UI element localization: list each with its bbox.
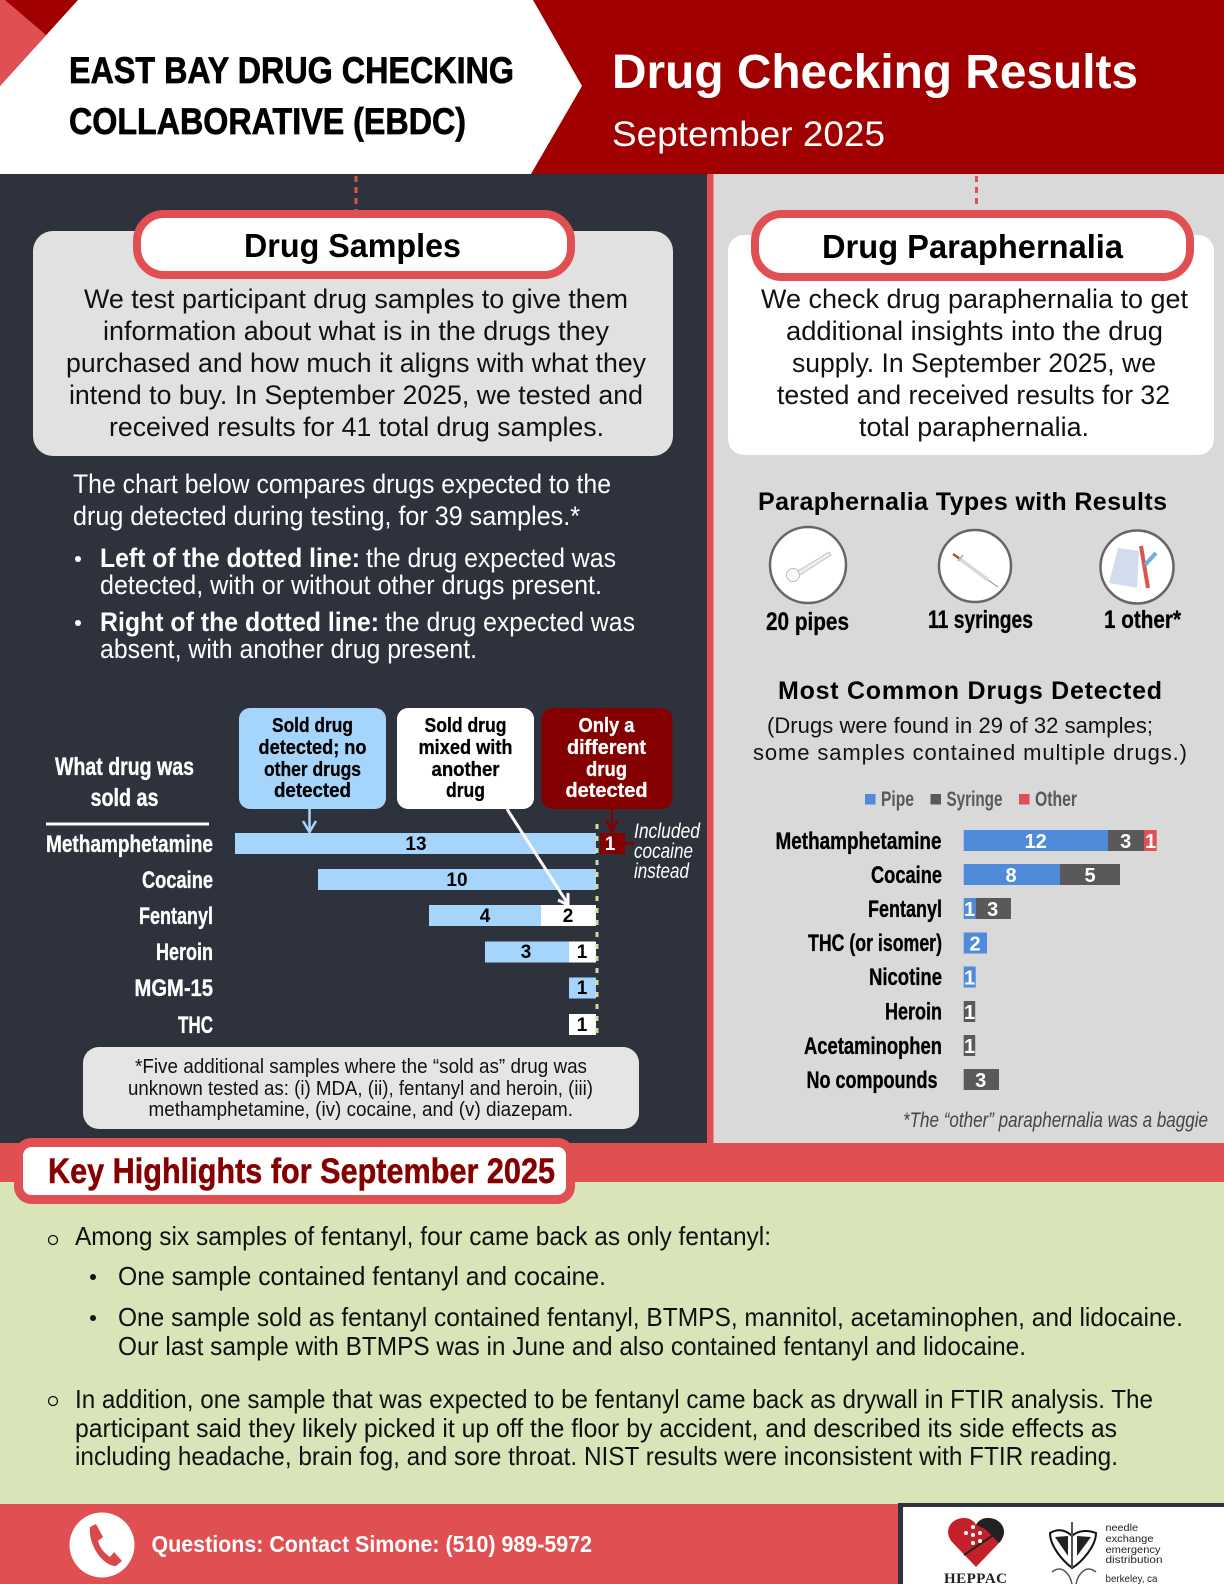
arrow: red legend to bar <box>606 809 618 831</box>
label: 20 pipes: 20 pipes <box>766 608 849 636</box>
heading: drug paraphernalia: Drug Paraphernalia <box>822 228 1124 265</box>
legend box: sold drug detected: other drugs <box>264 759 361 781</box>
dotted divider line <box>596 824 598 1037</box>
label: 11 syringes: 11 syringes <box>928 606 1033 634</box>
row labels <box>776 828 942 1094</box>
column heading: what drug was sold as: What drug was <box>55 753 194 781</box>
row labels <box>46 831 213 1039</box>
footnote box: additional samples <box>83 1047 639 1129</box>
contact text: Questions: Contact Simone: (510) 989-5972 <box>152 1531 592 1557</box>
icon: baggie <box>1100 530 1174 604</box>
heading: drug samples <box>137 214 571 275</box>
row labels: MGM-15 <box>134 975 213 1002</box>
panel: drug samples <box>0 174 707 1143</box>
legend box: sold drug detected: Sold drug <box>272 715 353 737</box>
row labels: Cocaine <box>871 862 942 889</box>
highlight: drywall sample: including headache, brain fog, and sore throat. NIST results were inconsistent with FTIR reading. <box>75 1441 1118 1471</box>
highlight: fentanyl samples: Our last sample with BTMPS was in June and also contained fentanyl and lidocaine. <box>118 1331 1026 1361</box>
footer <box>0 1503 1224 1584</box>
row labels: Heroin <box>156 939 213 966</box>
row labels: Fentanyl <box>868 896 942 923</box>
legend box: sold drug mixed: another <box>432 759 500 781</box>
callout: included cocaine instead: instead <box>634 860 690 883</box>
heading: paraphernalia types: Paraphernalia Types with Results <box>758 488 1167 516</box>
highlight: drywall sample: In addition, one sample that was expected to be fentanyl came back as drywall in FTIR analysis. The <box>75 1384 1153 1414</box>
chart legend: Syringe <box>946 788 1002 811</box>
highlight: drywall sample: participant said they likely picked it up off the floor by accident, and described its side effects as <box>75 1413 1117 1443</box>
bars: 1 <box>964 1036 975 1058</box>
chart explanation text <box>73 469 635 664</box>
row labels: Cocaine <box>142 867 213 894</box>
chart legend <box>865 788 1077 811</box>
legend box: only a different drug: different <box>567 737 646 759</box>
footnote box: additional samples: *Five additional samples where the “sold as” drug was <box>135 1056 587 1078</box>
description box: We test participant drug samples to give them <box>84 284 628 314</box>
bars: 3 <box>1120 831 1131 853</box>
row labels: Fentanyl <box>139 903 213 930</box>
description box: additional insights into the drug <box>786 316 1163 346</box>
row labels: No compounds <box>806 1067 938 1094</box>
row labels: Heroin <box>885 998 942 1026</box>
logo text: needle exchange: exchange <box>1106 1533 1154 1545</box>
description box: information about what is in the drugs they <box>103 316 609 346</box>
header banner: September 2025 <box>612 115 885 154</box>
bars: 3 <box>987 899 998 921</box>
chart explanation text: The chart below compares drugs expected to the <box>73 469 611 499</box>
footnote box: additional samples: unknown tested as: (i) MDA, (ii), fentanyl and heroin, (iii) <box>128 1078 593 1100</box>
chart explanation text: detected, with or without other drugs present. <box>100 570 602 600</box>
legend box: only a different drug: drug <box>586 759 627 781</box>
header banner <box>0 0 1224 174</box>
bars: 12 <box>1025 831 1047 853</box>
chart explanation text: the drug expected was <box>366 543 616 573</box>
legend box: sold drug mixed: drug <box>446 780 485 802</box>
legend box: sold drug mixed <box>397 708 534 809</box>
highlight: fentanyl samples <box>48 1221 1183 1361</box>
arrow: white legend to bar <box>507 809 568 905</box>
logo text: needle exchange: distribution <box>1106 1554 1163 1566</box>
legend box: sold drug detected: detected; no <box>258 737 366 759</box>
bars <box>235 833 634 1036</box>
heading: drug samples: Drug Samples <box>244 227 461 264</box>
legend box: only a different drug <box>542 708 672 809</box>
bars: 1 <box>577 1015 588 1036</box>
icon: needle exchange heart <box>1050 1522 1096 1584</box>
heading: most common drugs detected: Most Common Drugs Detected <box>778 677 1162 705</box>
bar chart: drugs detected <box>776 828 1157 1094</box>
callout: included cocaine instead: Included <box>634 820 701 843</box>
description box: purchased and how much it aligns with what they <box>66 348 646 378</box>
description box <box>33 231 673 456</box>
footnote box: additional samples: methamphetamine, (iv) cocaine, and (v) diazepam. <box>148 1099 573 1121</box>
logo text: needle exchange <box>1106 1522 1163 1584</box>
chart explanation text: Right of the dotted line: <box>100 607 379 637</box>
legend box: sold drug detected <box>239 708 386 809</box>
row labels: Nicotine <box>869 964 942 991</box>
icon: phone <box>70 1512 134 1578</box>
chart legend: Pipe <box>881 788 914 811</box>
legend box: sold drug detected: detected <box>274 780 351 802</box>
highlight: fentanyl samples: One sample contained fentanyl and cocaine. <box>118 1261 606 1291</box>
bars: 4 <box>480 906 491 927</box>
icon: syringe <box>939 530 1011 602</box>
callout: included cocaine instead <box>634 820 701 883</box>
bars: 1 <box>605 834 616 855</box>
bars: 1 <box>964 1002 975 1024</box>
chart explanation text: Left of the dotted line: <box>100 543 360 573</box>
bars: 1 <box>964 968 975 990</box>
column heading: what drug was sold as <box>46 753 209 826</box>
description box: supply. In September 2025, we <box>792 348 1156 378</box>
logo panel <box>898 1503 1224 1584</box>
chart explanation text: absent, with another drug present. <box>100 634 477 664</box>
description box <box>728 235 1214 455</box>
bars: 2 <box>563 906 573 927</box>
heading: key highlights: Key Highlights for September 2025 <box>48 1152 555 1191</box>
heading: key highlights <box>18 1142 570 1200</box>
bars: 3 <box>521 942 531 963</box>
description box: tested and received results for 32 <box>777 380 1170 410</box>
bars: 1 <box>577 978 588 999</box>
highlight: drywall sample <box>48 1384 1153 1471</box>
row labels: Methamphetamine <box>776 828 942 855</box>
bars: 8 <box>1005 865 1017 887</box>
row labels: THC <box>178 1012 213 1039</box>
arrow: blue legend to bar <box>303 809 316 832</box>
callout: included cocaine instead: cocaine <box>634 840 693 863</box>
heading: drug paraphernalia <box>755 214 1190 277</box>
description box: received results for 41 total drug samples. <box>109 412 604 442</box>
chart explanation text: the drug expected was <box>385 607 635 637</box>
bars: 2 <box>969 934 981 956</box>
bars: 1 <box>964 899 975 921</box>
logo text: needle exchange: emergency <box>1106 1544 1161 1556</box>
heading: most common drugs detected: some samples contained multiple drugs.) <box>753 740 1187 765</box>
description box: We check drug paraphernalia to get <box>761 284 1188 314</box>
header banner: COLLABORATIVE (EBDC) <box>69 101 466 142</box>
panel: drug paraphernalia <box>707 174 1224 1143</box>
legend box: sold drug mixed: Sold drug <box>424 715 506 737</box>
label: 1 other: 1 other* <box>1104 606 1181 634</box>
icon: heppac heart <box>948 1518 1004 1567</box>
logo text: needle exchange: needle <box>1106 1522 1138 1534</box>
bars: 5 <box>1084 865 1096 887</box>
bars: 3 <box>975 1070 986 1092</box>
bars <box>964 830 1157 1092</box>
header banner: Drug Checking Results <box>612 46 1138 99</box>
bars: 1 <box>1145 831 1156 853</box>
chart: sold as vs detected <box>46 708 701 1039</box>
panel: key highlights <box>0 1142 1224 1504</box>
chart explanation text: drug detected during testing, for 39 samples.* <box>73 501 580 531</box>
row labels: THC (or isomer) <box>808 930 942 957</box>
row labels: Methamphetamine <box>46 831 213 858</box>
row labels: Acetaminophen <box>804 1033 942 1060</box>
bars: 10 <box>446 870 468 891</box>
icon: pipe <box>770 527 846 603</box>
header banner: EAST BAY DRUG CHECKING <box>69 50 514 91</box>
legend box: only a different drug: detected <box>566 780 648 802</box>
description box: total paraphernalia. <box>859 412 1089 442</box>
bars: 1 <box>577 942 588 963</box>
highlight: fentanyl samples: Among six samples of fentanyl, four came back as only fentanyl: <box>75 1221 771 1251</box>
bars: 13 <box>405 834 427 855</box>
legend box: sold drug mixed: mixed with <box>418 737 512 759</box>
heading: most common drugs detected: (Drugs were found in 29 of 32 samples; <box>767 713 1153 738</box>
legend box: only a different drug: Only a <box>578 715 635 737</box>
column heading: what drug was sold as: sold as <box>90 784 158 812</box>
description box: intend to buy. In September 2025, we tested and <box>69 380 643 410</box>
chart legend: Other <box>1035 788 1077 811</box>
heading: most common drugs detected <box>753 677 1187 765</box>
highlight: fentanyl samples: One sample sold as fentanyl contained fentanyl, BTMPS, mannitol, acetaminophen, and lidocaine. <box>118 1302 1183 1332</box>
